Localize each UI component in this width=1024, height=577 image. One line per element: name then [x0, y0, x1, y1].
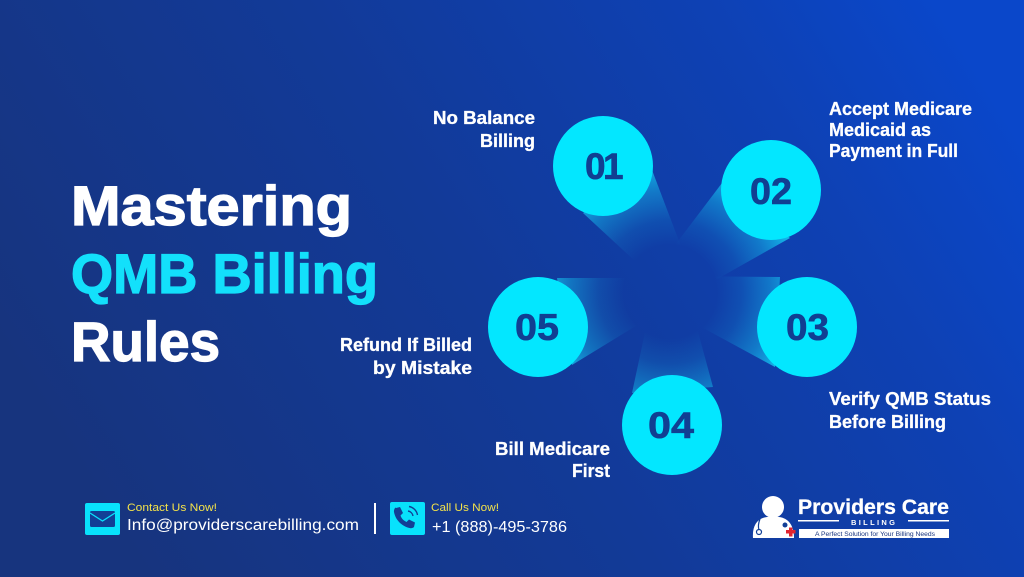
step 04: 04 — [648, 405, 694, 446]
title — [71, 174, 378, 373]
label: step 04: First — [572, 461, 610, 481]
step 05: 05 — [515, 307, 559, 348]
label: step 05 — [340, 335, 472, 378]
step 05 — [488, 277, 588, 377]
contact: email — [85, 502, 359, 535]
step 02 — [721, 140, 821, 240]
label: step 01 — [433, 108, 535, 151]
title: QMB Billing — [71, 242, 378, 305]
radial step diagram — [488, 116, 857, 475]
beam 05 — [557, 278, 670, 365]
beam 04 — [632, 295, 713, 393]
title: Mastering — [71, 174, 352, 237]
contact: phone: +1 (888)-495-3786 — [432, 519, 567, 536]
icon: envelope — [85, 503, 120, 535]
label: step 04: Bill Medicare — [495, 439, 610, 459]
label: step 03: Verify QMB Status — [829, 389, 991, 409]
contact: phone: Call Us Now! — [431, 502, 499, 514]
label: step 01: No Balance — [433, 108, 535, 128]
label: step 03: Before Billing — [829, 412, 946, 432]
label: step 02 — [829, 99, 972, 161]
step 03 — [757, 277, 857, 377]
contact: email: Contact Us Now! — [127, 502, 217, 514]
logo: Providers Care Billing — [753, 496, 949, 538]
logo: Providers Care Billing: BILLING — [851, 518, 895, 527]
beam 02 — [660, 183, 790, 300]
step 04 — [622, 375, 722, 475]
logo: Providers Care Billing: Providers Care — [798, 496, 949, 519]
label: step 02: Accept Medicare — [829, 99, 972, 119]
step 01: 01 — [585, 146, 624, 187]
contact: phone — [390, 502, 567, 536]
step 01 — [553, 116, 653, 216]
beam 03 — [670, 276, 780, 367]
title: Rules — [71, 310, 220, 373]
label: step 01: Billing — [480, 131, 535, 151]
label: step 04 — [495, 439, 610, 481]
logo: Providers Care Billing: A Perfect Solution for Your Billing Needs — [815, 531, 935, 538]
step 02: 02 — [750, 171, 792, 212]
label: step 02: Payment in Full — [829, 141, 958, 161]
label: step 05: Refund If Billed — [340, 335, 472, 355]
icon: doctor — [753, 496, 796, 538]
step 03: 03 — [786, 307, 829, 348]
beam 01 — [583, 170, 690, 275]
label: step 03 — [829, 389, 991, 432]
icon: phone — [390, 502, 425, 535]
contact: email: Info@providerscarebilling.com — [127, 517, 359, 534]
label: step 05: by Mistake — [373, 358, 472, 378]
label: step 02: Medicaid as — [829, 120, 931, 140]
